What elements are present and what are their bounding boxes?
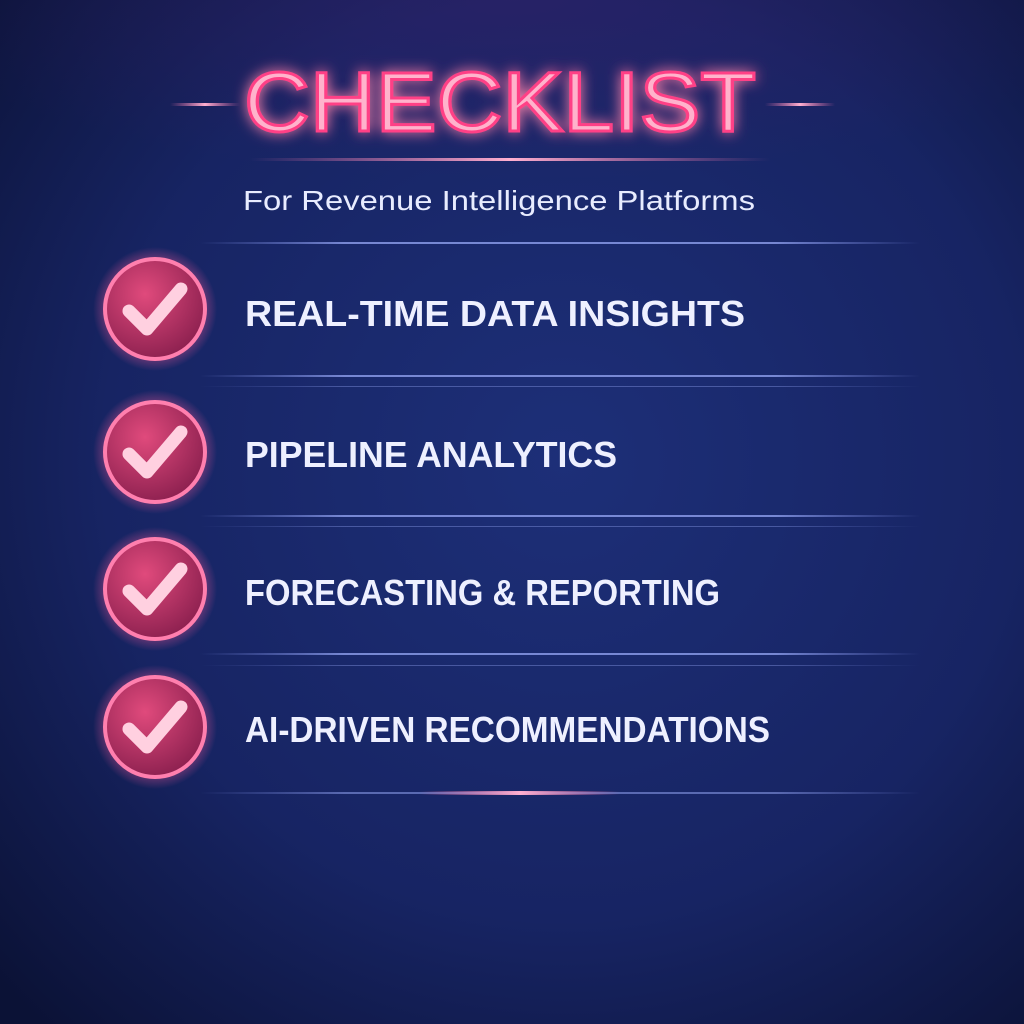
item 3: FORECASTING & REPORTING — [245, 572, 720, 613]
title — [170, 55, 835, 161]
item 4: AI-DRIVEN RECOMMENDATIONS — [245, 709, 770, 750]
item 1: REAL-TIME DATA INSIGHTS — [245, 293, 745, 334]
subtitle: For Revenue Intelligence Platforms — [243, 185, 755, 216]
item 1 — [93, 247, 745, 371]
item 2: PIPELINE ANALYTICS — [245, 434, 617, 475]
title: CHECKLIST — [244, 55, 756, 149]
item 4 — [93, 665, 770, 789]
item 2 — [93, 390, 617, 514]
item 3 — [93, 527, 720, 651]
